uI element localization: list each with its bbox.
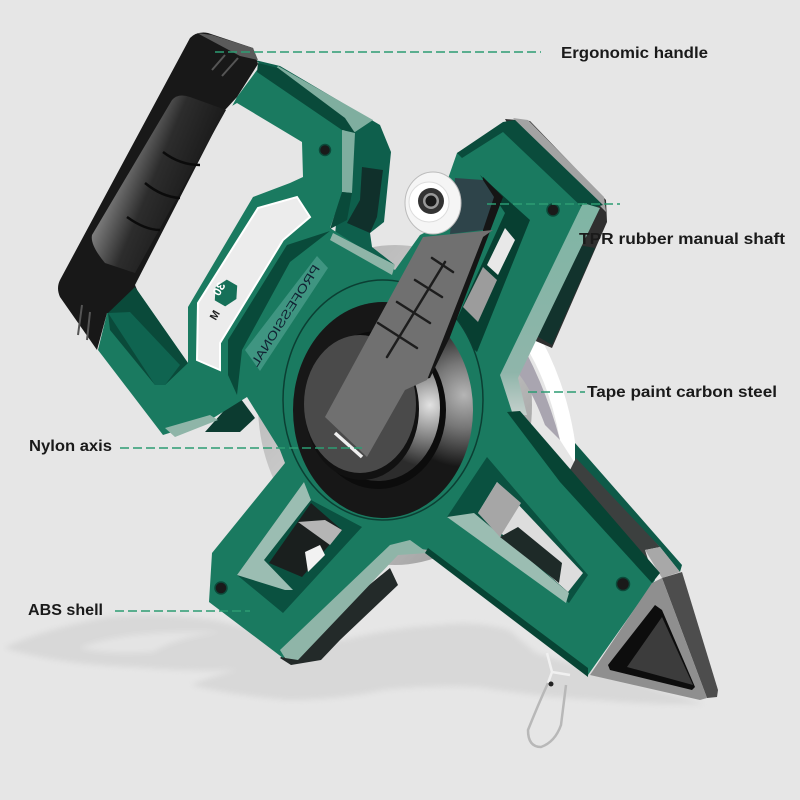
label: TPR rubber manual shaft: TPR rubber manual shaft (579, 231, 786, 248)
lower handle back (205, 395, 255, 432)
inner window (565, 458, 660, 572)
PROFESSIONAL plate: PROFESSIONAL (247, 262, 323, 370)
arm shadow (420, 177, 503, 380)
nut face (409, 182, 449, 222)
hub (283, 280, 483, 520)
grey cap (645, 547, 680, 578)
crank arm (325, 177, 503, 457)
handle back dark side (255, 60, 395, 265)
silver cup rim (316, 335, 440, 481)
bolt (405, 172, 494, 234)
reel shadow edge (515, 352, 560, 440)
black ring (293, 302, 473, 518)
vertical light strip (342, 130, 355, 193)
ridges (78, 55, 238, 340)
hex socket (418, 188, 444, 214)
grip pad (92, 96, 226, 273)
screws (215, 144, 630, 594)
black handle grip (58, 33, 258, 350)
label: tape paint carbon steel: Tape paint carbon steel (587, 384, 777, 401)
dark band (330, 192, 352, 229)
upper right back plate (505, 118, 607, 348)
inner cup (310, 331, 446, 489)
label: nylon axis: Nylon axis (29, 438, 112, 455)
lower handle dark recess (108, 287, 188, 385)
lower arm light bevel (280, 540, 428, 660)
tape reel (258, 245, 578, 565)
triangular tip (590, 572, 718, 700)
reel disc (258, 245, 532, 565)
tip inner floor (627, 617, 693, 685)
light hub strip (330, 233, 395, 275)
hub outline (283, 280, 483, 520)
grey rim (513, 118, 606, 212)
dark stripe beside plate (228, 231, 330, 395)
size badge: 30 (210, 280, 228, 299)
label plate (197, 197, 310, 370)
dark lower right edge (507, 411, 660, 583)
tip dark side (662, 572, 718, 698)
arm body (325, 230, 493, 457)
top dark edge of right arm (457, 120, 603, 210)
main green body (98, 70, 655, 675)
ground shadow (4, 615, 705, 704)
handle opening (135, 103, 303, 363)
dark rim (505, 119, 607, 348)
black body (58, 33, 258, 350)
green strip (575, 443, 682, 572)
lower right window (447, 457, 588, 603)
cup floor shadow (305, 338, 419, 480)
cup floor (304, 335, 416, 473)
sleeve (450, 178, 494, 234)
grip ridges (127, 152, 200, 230)
tip grey band (590, 578, 707, 700)
lower left window (237, 482, 362, 613)
label: ergonomic handle: Ergonomic handle (561, 45, 708, 62)
grey top facet (197, 33, 258, 60)
white pin (335, 433, 362, 457)
carabiner hook (528, 653, 570, 747)
lower right back plate (565, 443, 682, 578)
nut (405, 172, 461, 234)
dark interior (530, 245, 595, 345)
lower handle light strip (165, 415, 218, 437)
size badge (207, 275, 242, 309)
handle dark stripe (257, 63, 355, 133)
handle light strip (270, 66, 373, 132)
handle side slot (347, 167, 383, 233)
lower arm dark edge (425, 548, 588, 677)
unit: M (208, 309, 223, 322)
light strip on right arm (500, 203, 600, 415)
lower left back plate (280, 568, 398, 665)
plate (197, 197, 310, 370)
arm ruler marks (378, 258, 453, 357)
white tape edge (525, 328, 578, 468)
upper right window (452, 175, 530, 352)
label: ABS shell: ABS shell (28, 602, 103, 619)
PROFESSIONAL plate (245, 256, 328, 371)
tip inner hole (608, 605, 695, 690)
